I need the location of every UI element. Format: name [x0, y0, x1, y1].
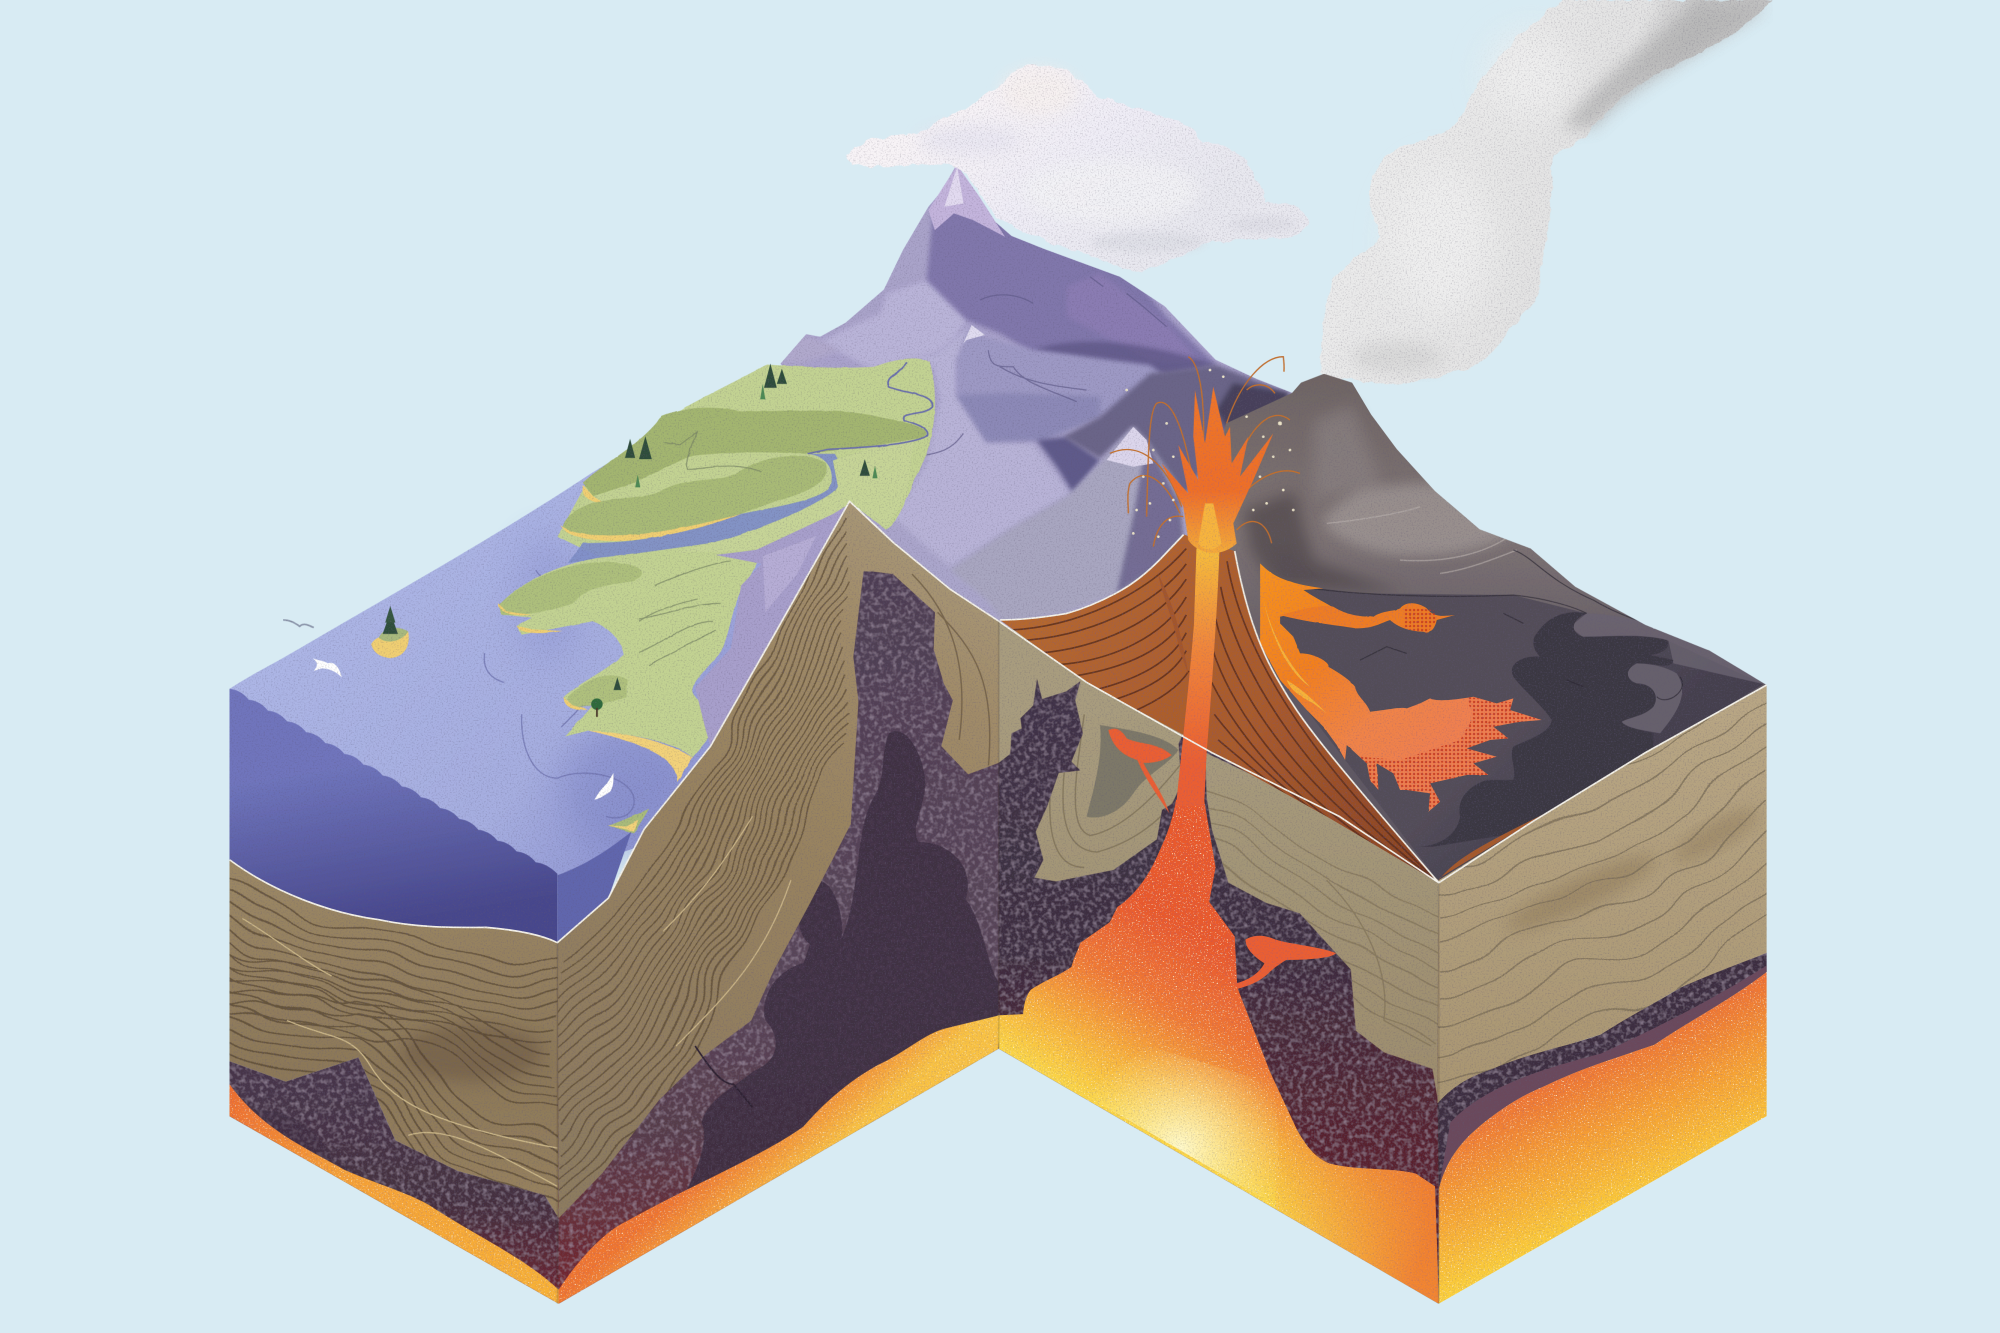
central magma chamber: [997, 800, 1439, 1304]
birds: [283, 620, 614, 800]
left-block magma band: [230, 1084, 559, 1304]
white surface lines along cut edges: [230, 501, 1767, 943]
right face tan strata: [1438, 676, 1767, 1103]
trees on the land: [591, 364, 878, 717]
volcanic smoke plume: [1321, 0, 1773, 384]
centre-right tan strata: [1205, 753, 1439, 1098]
left face strata: [230, 860, 559, 1231]
lava flows on the volcano slope: [1260, 563, 1547, 813]
tan rock island with sill: [999, 621, 1184, 881]
volcano cross-section with strata: [1000, 534, 1439, 883]
lower magma sill: [1235, 936, 1336, 989]
lava fountain with arcs and sparks: [1110, 357, 1300, 553]
background mountain: [780, 163, 1292, 631]
purple mountain slope behind the ridge cut: [695, 504, 849, 746]
centre-left magma band: [559, 1015, 999, 1304]
whole drawing with paper grain: [230, 0, 1773, 1304]
right face purple rock layers: [1438, 953, 1767, 1189]
ocean side face: [230, 689, 631, 943]
centre-left face: rock base: [557, 501, 999, 1304]
illustration: isometric crust block: [230, 0, 1772, 1304]
upper magma sill: [1108, 729, 1172, 813]
right face magma: [1439, 972, 1767, 1304]
red-brown rim under lava field: [1439, 811, 1550, 880]
small offshore island with tree: [371, 606, 409, 658]
right volcano cone: [1199, 374, 1767, 883]
centre-right face: rock base: [999, 621, 1439, 1304]
left block lower rock layer: [230, 1057, 559, 1304]
crack into rock: [695, 1046, 753, 1107]
white cloud over the peak: [846, 66, 1308, 270]
central conduit: [1176, 549, 1219, 806]
centre-left face: folded brown strata: [557, 501, 999, 1218]
green land with beaches and river: [498, 358, 935, 833]
lava field surface with dark flow waves: [1260, 483, 1763, 883]
deep rock blobs: [242, 731, 999, 1231]
fold lines between block faces: [557, 621, 1439, 1304]
sea surface: [230, 421, 842, 875]
